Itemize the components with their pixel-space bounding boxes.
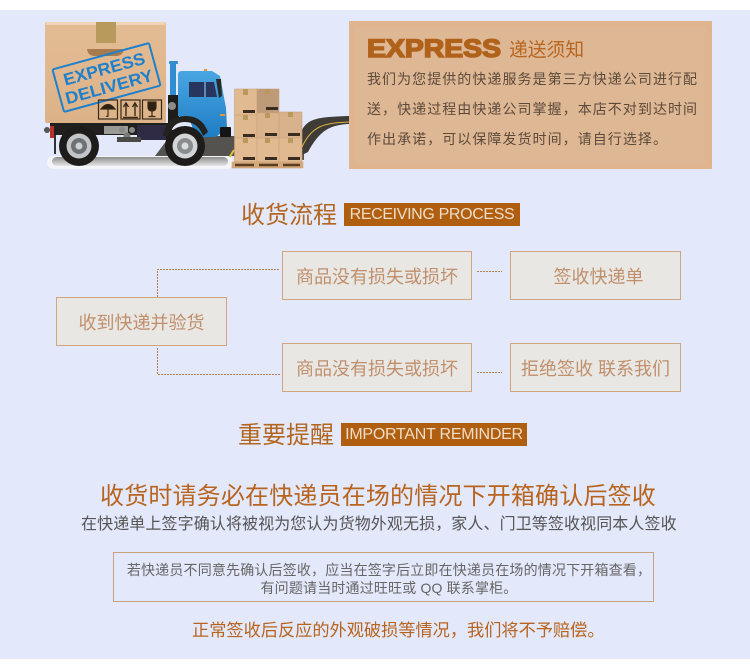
notice text: 送，快递过程由快递公司掌握，本店不对到达时间 — [367, 101, 698, 117]
connector: lower result — [477, 372, 502, 373]
step: receive and inspect — [56, 297, 227, 346]
note box: 有问题请当时通过旺旺或 QQ 联系掌柜。 — [261, 580, 517, 596]
step: goods undamaged: 商品没有损失或损坏 — [296, 266, 458, 286]
heading: delivery notice: 递送须知 — [509, 39, 584, 60]
note box: 若快递员不同意先确认后签收，应当在签字后立即在快递员在场的情况下开箱查看， — [127, 562, 651, 578]
closing statement: 正常签收后反应的外观破损等情况，我们将不予赔偿。 — [192, 620, 605, 640]
label: receiving process: RECEIVING PROCESS — [350, 206, 514, 222]
chassis — [44, 123, 186, 154]
note box — [113, 552, 654, 602]
heading: important reminder: 重要提醒 — [238, 422, 334, 449]
heading: receiving process: 收货流程 — [241, 202, 337, 229]
text: signature terms: 在快递单上签字确认将被视为您认为货物外观无损，家人、门卫等签收视同本人签收 — [81, 516, 677, 533]
label: receiving process — [344, 203, 520, 226]
stamp: express delivery — [52, 43, 161, 112]
step: goods damaged — [282, 343, 472, 392]
stacked parcels on pallet — [232, 89, 303, 168]
road — [155, 116, 349, 160]
stamp: express delivery: DELIVERY — [63, 66, 156, 108]
cab — [163, 61, 231, 137]
heading: EXPRESS: EXPRESS — [367, 35, 501, 63]
rear wheel — [59, 126, 99, 166]
notice text — [367, 71, 698, 147]
connector: lower branch — [157, 348, 280, 375]
notice text: 我们为您提供的快递服务是第三方快递公司进行配 — [367, 71, 698, 87]
label: important reminder: IMPORTANT REMINDER — [345, 426, 523, 442]
step: receive and inspect: 收到快递并验货 — [78, 312, 204, 332]
handling icons — [98, 100, 162, 119]
panel: express notice — [349, 21, 712, 169]
notice text: 作出承诺，可以保障发货时间，请自行选择。 — [367, 131, 668, 147]
stamp: express delivery: EXPRESS — [61, 49, 147, 90]
panel inner tint — [355, 27, 706, 163]
cargo box — [45, 22, 166, 123]
illustration: delivery truck with boxes — [44, 22, 349, 169]
step: refuse and contact — [510, 343, 681, 392]
step: sign the waybill — [510, 251, 681, 300]
headline: sign after opening: 收货时请务必在快递员在场的情况下开箱确认后签收 — [100, 483, 656, 510]
ground shadow — [47, 156, 233, 169]
step: goods damaged: 商品没有损失或损坏 — [296, 358, 458, 378]
step: sign the waybill: 签收快递单 — [554, 266, 644, 286]
step: goods undamaged — [282, 251, 472, 300]
front wheel — [165, 126, 205, 166]
connector: upper result — [477, 271, 502, 272]
connector: upper branch — [157, 269, 279, 297]
step: refuse and contact: 拒绝签收 联系我们 — [521, 358, 670, 378]
